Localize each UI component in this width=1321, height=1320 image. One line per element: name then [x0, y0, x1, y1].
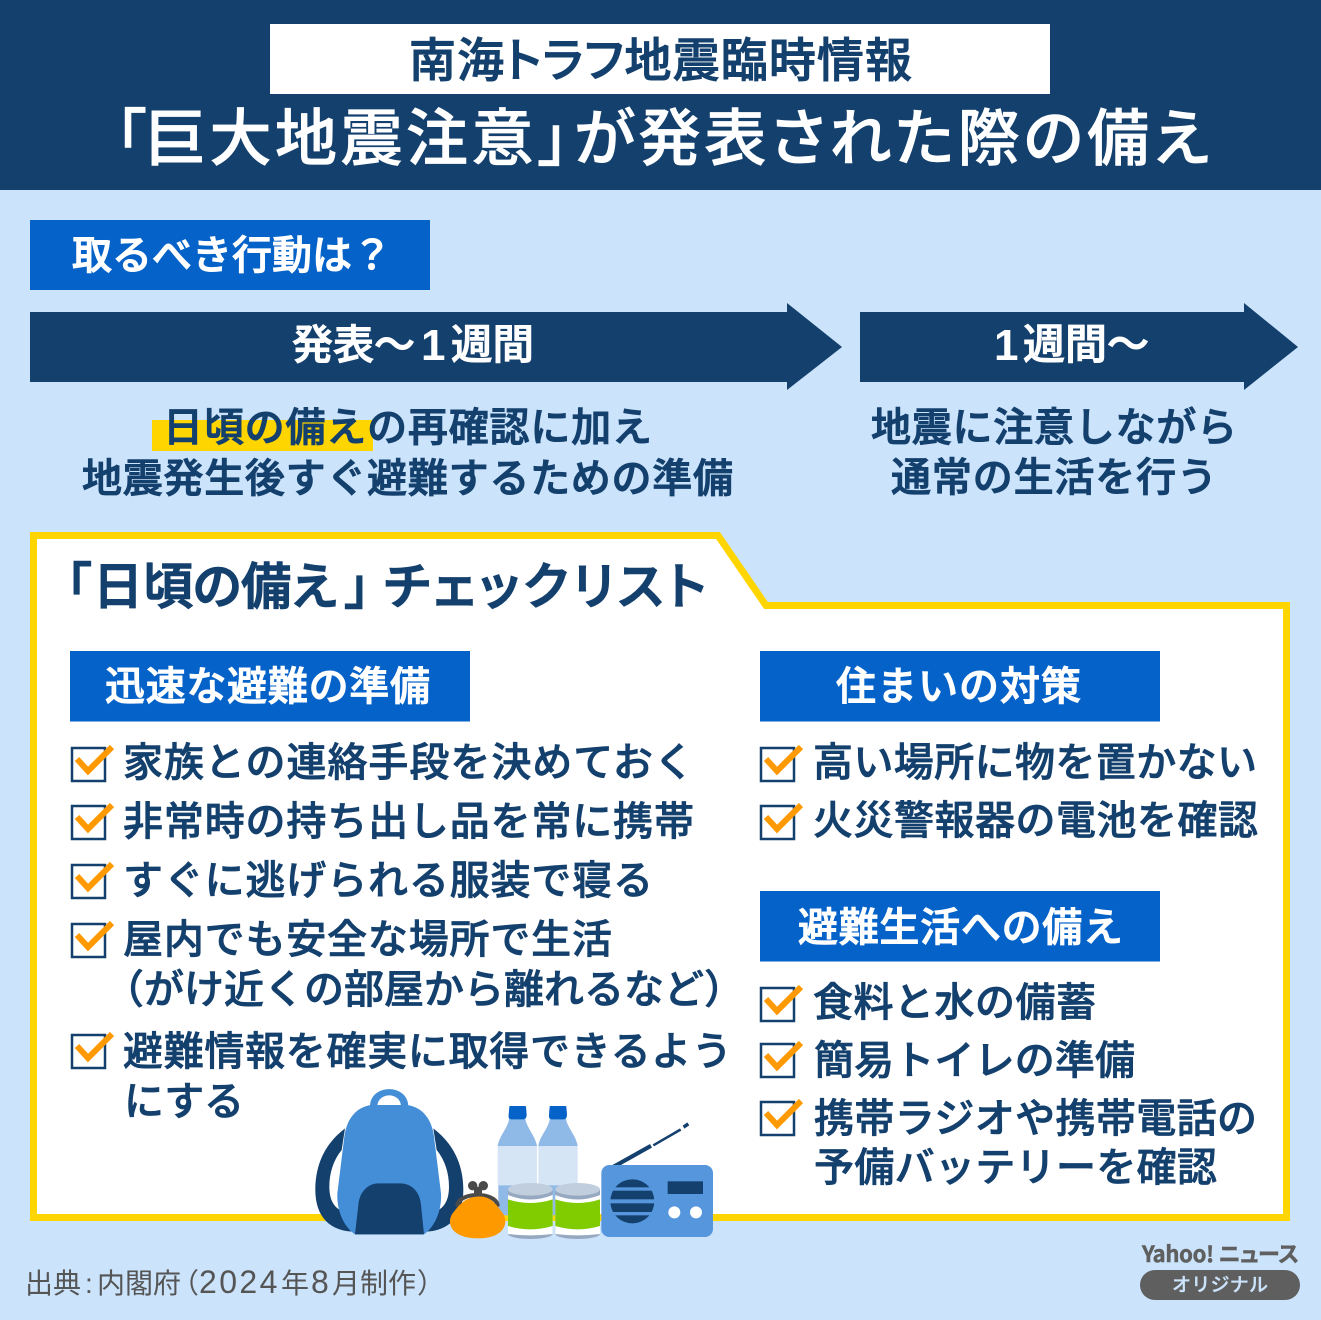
section heading: home measures: 住まいの対策: [836, 665, 1081, 709]
icon: checkbox: [72, 923, 112, 957]
illustration: emergency supplies: [315, 1089, 713, 1239]
checklist: quick evacuation items: 避難情報を確実に取得できるよう: [123, 1030, 732, 1074]
source note: 8: [311, 1264, 329, 1300]
section heading: evacuation life: [760, 891, 1160, 962]
arrow: first week: [30, 303, 842, 390]
icon: checkbox: [761, 805, 801, 839]
checklist: quick evacuation items: 屋内でも安全な場所で生活: [123, 918, 612, 962]
text block: after one week action: 通常の生活を行う: [891, 456, 1217, 500]
checklist: quick evacuation items: [72, 741, 744, 1124]
icon: checkbox: [72, 805, 112, 839]
heading: action: 取るべき行動は？: [72, 234, 392, 278]
title: main: が発表された際の備え: [574, 105, 1209, 174]
checklist: home measures items: [761, 741, 1258, 843]
heading: checklist: [66, 559, 706, 615]
icon: coin purse: [450, 1181, 505, 1238]
heading: checklist: 日頃の備え: [93, 559, 336, 615]
icon: water bottles: [498, 1106, 578, 1215]
logo: Yahoo news original: [1140, 1237, 1300, 1300]
icon: checkbox: [72, 864, 112, 898]
title: main: [115, 105, 1209, 174]
icon: checkbox: [72, 747, 112, 781]
checklist: quick evacuation items: （がけ近くの部屋から離れるなど）: [104, 968, 744, 1012]
icon: checkbox: [761, 747, 801, 781]
checklist: evacuation life items: 予備バッテリーを確認: [814, 1146, 1217, 1190]
section heading: quick evacuation: 迅速な避難の準備: [105, 665, 430, 709]
title: subtitle: 南海トラフ地震臨時情報: [409, 34, 912, 87]
arrow: first week: 発表〜: [292, 322, 415, 368]
checklist: evacuation life items: 簡易トイレの準備: [814, 1039, 1135, 1083]
arrow: after one week: 1: [994, 321, 1018, 370]
icon: checkbox: [761, 987, 801, 1021]
checklist: home measures items: 高い場所に物を置かない: [813, 741, 1257, 785]
source note: 出典: [25, 1268, 81, 1299]
arrow: first week: 1: [421, 321, 445, 370]
title: main: 巨大地震注意: [144, 105, 537, 174]
checklist: quick evacuation items: にする: [124, 1080, 244, 1124]
source note: 内閣府: [97, 1268, 181, 1299]
source note: ）: [418, 1268, 432, 1299]
logo: Yahoo news original: オリジナル: [1172, 1275, 1268, 1296]
title: main: 」: [538, 105, 569, 174]
title: main: 「: [115, 105, 146, 174]
section heading: home measures: [760, 651, 1160, 722]
heading: action: [30, 220, 430, 290]
text block: first week action: [82, 406, 733, 501]
checklist: evacuation life items: 食料と水の備蓄: [813, 981, 1096, 1025]
checklist: evacuation life items: 携帯ラジオや携帯電話の: [814, 1097, 1257, 1141]
text block: first week action: 地震発生後すぐ避難するための準備: [82, 457, 733, 501]
heading: checklist: チェックリスト: [384, 559, 706, 615]
header band: [0, 0, 1321, 190]
icon: backpack: [315, 1089, 463, 1234]
source note: 年: [281, 1268, 309, 1299]
source note: :: [85, 1268, 93, 1299]
icon: radio: [601, 1122, 713, 1237]
text block: first week action: 日頃の備えの再確認に加え: [163, 406, 652, 450]
checklist: quick evacuation items: 非常時の持ち出し品を常に携帯: [123, 800, 694, 844]
arrow: after one week: 週間〜: [1023, 321, 1149, 368]
checklist: home measures items: 火災警報器の電池を確認: [813, 799, 1258, 843]
arrow: after one week: [860, 303, 1298, 390]
panel: checklist frame: [34, 536, 1286, 1218]
source note: 2024: [199, 1264, 280, 1300]
icon: cans: [508, 1183, 600, 1239]
arrow: first week: 週間: [451, 321, 534, 368]
text block: after one week action: [871, 406, 1237, 500]
icon: checkbox: [761, 1101, 801, 1135]
section heading: evacuation life: 避難生活への備え: [798, 906, 1123, 950]
heading: checklist: 「: [66, 559, 91, 615]
source note: 月制作: [332, 1268, 416, 1299]
heading: checklist: 」: [345, 559, 370, 615]
source note: （: [184, 1268, 198, 1299]
section heading: quick evacuation: [70, 651, 470, 722]
text block: after one week action: 地震に注意しながら: [871, 406, 1237, 450]
checklist: quick evacuation items: すぐに逃げられる服装で寝る: [123, 859, 653, 903]
icon: checkbox: [761, 1043, 801, 1077]
logo: Yahoo news original: Yahoo! ニュース: [1141, 1237, 1299, 1269]
icon: checkbox: [72, 1034, 112, 1068]
checklist: quick evacuation items: 家族との連絡手段を決めておく: [123, 741, 694, 785]
checklist: evacuation life items: [761, 981, 1257, 1190]
